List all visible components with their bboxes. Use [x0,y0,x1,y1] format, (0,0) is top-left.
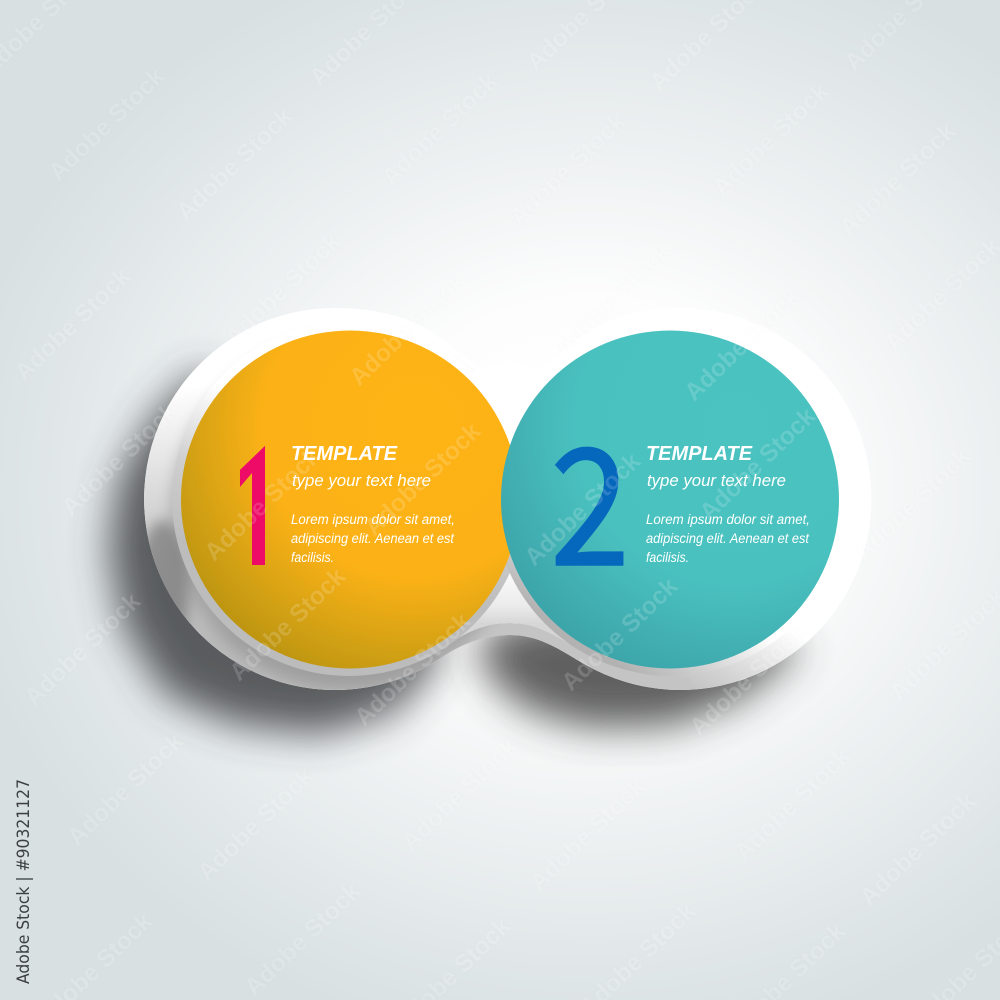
body text 2: adipiscing elit. Aenean et est [646,531,810,546]
watermarks: Adobe Stock [377,68,503,191]
watermarks: Adobe Stock [172,103,298,226]
body text 2 [646,512,810,565]
watermarks: Adobe Stock [397,733,523,856]
watermarks: Adobe Stock [550,238,676,361]
watermarks: Adobe Stock [835,118,961,241]
watermarks: Adobe Stock [360,418,486,541]
watermarks: Adobe Stock [520,448,646,571]
body text 2: facilisis. [646,550,689,565]
circle 2: teal [501,330,839,668]
body text 1: adipiscing elit. Aenean et est [291,531,455,546]
watermarks: Adobe Stock [730,743,856,866]
watermarks: Adobe Stock [855,788,981,911]
body text 2: Lorem ipsum dolor sit amet, [646,512,810,527]
number 2: 2 [550,377,630,612]
watermarks: Adobe Stock [20,588,146,711]
inner paper shape [172,322,846,676]
body text 1 [291,512,455,565]
stock id label: Adobe Stock | #90321127 [14,779,34,984]
body text 1: Lorem ipsum dolor sit amet, [291,512,455,527]
drop shadow: left disc [108,370,440,735]
circle 1: yellow [181,330,519,668]
subheading 2: type your text here [647,471,786,490]
watermarks: Adobe Stock [557,573,683,696]
outer paper shape [137,308,872,690]
heading 1: TEMPLATE [291,443,398,465]
watermarks: Adobe Stock [850,443,976,566]
watermarks: Adobe Stock [63,728,189,851]
watermarks: Adobe Stock [225,563,351,686]
watermarks: Adobe Stock [44,63,170,186]
watermarks: Adobe Stock [350,608,476,731]
watermarks: Adobe Stock [708,78,834,201]
watermarks: Adobe Stock [240,878,366,1000]
body text 1: facilisis. [291,550,334,565]
watermarks: Adobe Stock [685,618,811,741]
watermarks: Adobe Stock [220,228,346,351]
watermarks: Adobe Stock [10,263,136,386]
watermarks: Adobe Stock [695,403,821,526]
number 1: 1 [212,407,310,603]
watermarks: Adobe Stock [345,268,471,391]
watermarks: Adobe Stock [505,108,631,231]
drop shadow: right disc [475,600,802,728]
watermarks: Adobe Stock [525,773,651,896]
watermarks: Adobe Stock [193,763,319,886]
watermarks: Adobe Stock [680,283,806,406]
watermarks: Adobe Stock [200,443,326,566]
watermarks: Adobe Stock [57,398,183,521]
heading 2: TEMPLATE [646,443,753,465]
subheading 1: type your text here [292,471,431,490]
